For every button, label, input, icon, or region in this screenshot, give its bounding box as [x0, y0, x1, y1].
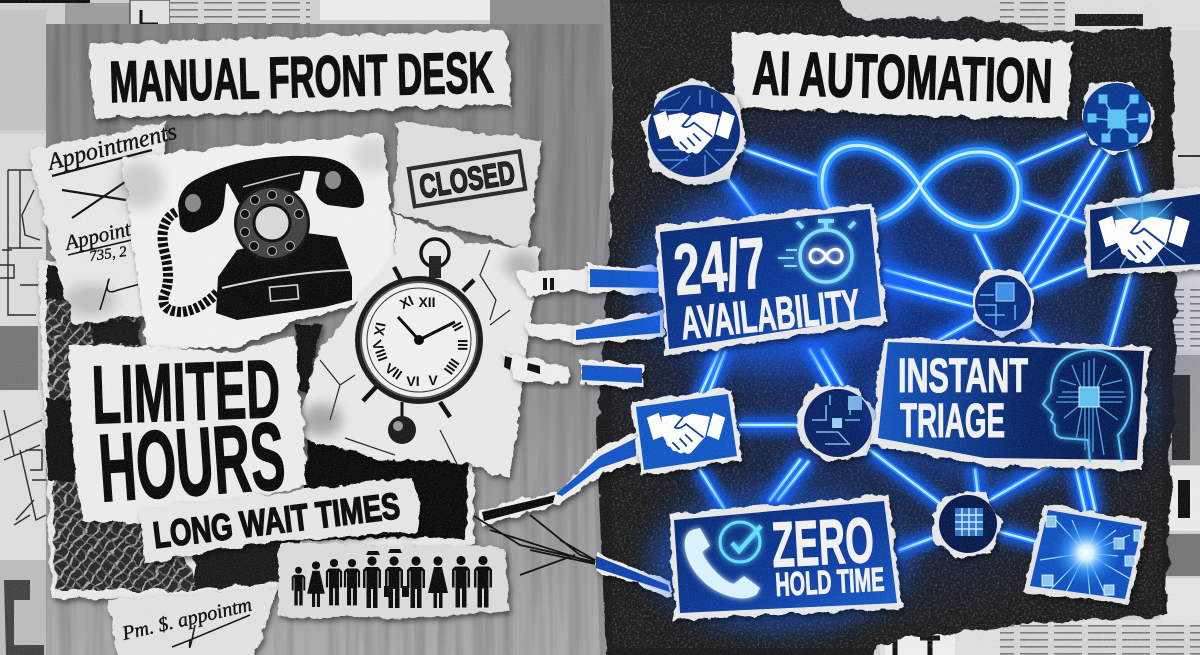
icon: pocket clock — [355, 239, 483, 444]
icon: rotary telephone — [162, 156, 364, 320]
pendulum — [388, 402, 416, 444]
badge: chip circle middle — [797, 385, 880, 463]
icon: AI head with circuit chip — [1043, 350, 1132, 462]
signature stroke — [172, 615, 250, 647]
torn ribbon and frayed wires — [474, 430, 672, 596]
icon: handshake — [647, 413, 725, 454]
panel: 24/7 availability — [640, 190, 900, 370]
appointment numbers: 735, 2 — [88, 244, 128, 265]
icon: handshake — [653, 111, 735, 154]
paper: manual front desk title — [90, 30, 512, 118]
stamp: CLOSED — [409, 151, 525, 206]
clock numerals: VIII — [369, 338, 391, 363]
icon: clock with check — [720, 522, 761, 562]
clock numerals: IX — [371, 321, 389, 338]
panel: burst of light with nodes — [1024, 504, 1148, 605]
paper: handwritten appointments list — [29, 119, 180, 324]
paper: limited hours headline — [68, 335, 307, 524]
icon: connected squares — [1088, 95, 1147, 142]
text: ZERO: ZERO — [770, 504, 876, 581]
network connection lines — [700, 135, 1140, 550]
stamp: CLOSED: CLOSED — [417, 154, 517, 205]
panel: glowing handshake — [1085, 188, 1200, 276]
telephone base — [216, 233, 352, 320]
text: AVAILABILITY: AVAILABILITY — [678, 279, 863, 349]
paper: clock illustration sheet — [295, 213, 540, 477]
clock numerals: V — [428, 372, 438, 388]
second appointment heading: Appointment — [61, 207, 174, 255]
badge: network nodes circle — [1080, 80, 1155, 155]
icon: stopwatch infinity — [778, 221, 855, 282]
icon: row of people — [292, 549, 492, 608]
base label plate — [269, 285, 299, 301]
text: HOLD TIME: HOLD TIME — [774, 560, 885, 603]
paper: queue of people — [279, 543, 509, 618]
crossed out entries — [52, 150, 152, 218]
panel: dark right background — [580, 0, 1200, 655]
text: LIMITED: LIMITED — [91, 344, 282, 441]
text: 24/7: 24/7 — [671, 223, 769, 311]
clock numerals: VII — [382, 360, 405, 383]
paper: telephone illustration sheet — [116, 133, 396, 349]
rotary dial — [234, 185, 310, 261]
title: MANUAL FRONT DESK: MANUAL FRONT DESK — [109, 40, 494, 115]
clock numerals — [369, 292, 471, 389]
crack lines — [320, 250, 510, 470]
clock numerals: XI — [397, 292, 416, 312]
burst — [1052, 519, 1120, 587]
icon: handshake — [1098, 216, 1190, 263]
panel: handshake card — [631, 388, 742, 476]
torn strips connecting both sides — [502, 264, 662, 388]
panel: cardboard background left — [46, 24, 610, 655]
note handwriting: Pm. $. appointm — [119, 594, 254, 645]
clock numerals: III — [455, 339, 471, 351]
signature — [100, 279, 140, 310]
left dark collage layer — [38, 260, 474, 600]
badge: chip circle top — [972, 270, 1036, 336]
clock numerals: II — [449, 319, 467, 334]
clock numerals: VI — [406, 373, 420, 389]
text: INSTANT: INSTANT — [898, 350, 1028, 403]
icon: glowing phone — [685, 528, 760, 598]
handset — [178, 156, 364, 232]
heading: Appointments: Appointments — [43, 119, 180, 176]
clock numerals: IIII — [441, 356, 463, 378]
heading underline — [68, 238, 140, 255]
text: TRIAGE: TRIAGE — [900, 395, 1005, 448]
paper: long wait times label — [140, 477, 421, 563]
paper: closed stamp sheet — [394, 122, 541, 248]
clock hands — [398, 317, 455, 340]
clock numerals: XII — [418, 294, 436, 310]
paper: AI automation title — [732, 33, 1072, 118]
text: LONG WAIT TIMES: LONG WAIT TIMES — [151, 485, 402, 556]
decorative blueprint scrap — [0, 170, 46, 525]
paper: bottom appointment note — [107, 588, 278, 655]
panel: instant triage — [870, 335, 1150, 475]
text: HOURS: HOURS — [95, 403, 288, 522]
badge: handshake circuit circle — [642, 78, 746, 186]
badge: chip circle lower — [932, 492, 1002, 558]
coiled cord — [162, 212, 218, 312]
panel: zero hold time — [650, 490, 910, 630]
